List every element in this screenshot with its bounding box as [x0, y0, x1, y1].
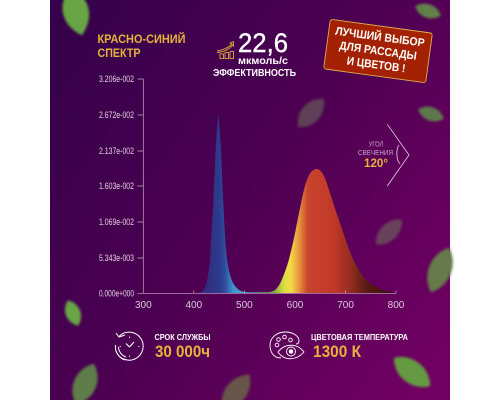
colour temperature label: ЦВЕТОВАЯ ТЕМПЕРАТУРА [311, 332, 408, 342]
x axis labels: 800 [388, 300, 405, 311]
service life value: 30 000ч [155, 343, 210, 361]
service life block [115, 332, 210, 361]
callout badge: И ЦВЕТОВ ! [346, 55, 406, 75]
angle label: СВЕЧЕНИЯ [358, 150, 393, 157]
spectrum chart [99, 74, 405, 311]
y axis labels: 2.137e-002 [99, 146, 134, 156]
colour temperature block [270, 332, 408, 361]
leaf: top right [413, 0, 443, 22]
callout badge: ЛУЧШИЙ ВЫБОР [334, 25, 426, 50]
y axis labels: 5.343e-003 [99, 253, 134, 263]
leaf: bottom centre [214, 368, 258, 400]
leaf: bottom right [387, 349, 437, 395]
icon: angle [387, 124, 409, 186]
leaf: right edge [421, 244, 459, 296]
leaf: top left [58, 0, 94, 38]
icon: efficiency growth [217, 42, 234, 58]
spectrum curve [195, 114, 396, 293]
leaf: upper middle [291, 92, 331, 134]
efficiency value [213, 28, 296, 79]
efficiency value: ЭФФЕКТИВНОСТЬ [213, 68, 296, 79]
heading: spectrum type: СПЕКТР [98, 48, 141, 60]
callout badge: ДЛЯ РАССАДЫ [338, 40, 417, 63]
y axis labels [99, 74, 134, 298]
leaf: lower left [61, 298, 85, 328]
y axis labels: 1.069e-002 [99, 217, 134, 227]
background panel [50, 0, 450, 400]
angle label [358, 142, 393, 170]
x axis labels: 500 [236, 300, 253, 311]
x axis labels: 700 [337, 300, 354, 311]
x axis labels: 600 [287, 300, 304, 311]
beam angle [358, 124, 409, 186]
x axis labels: 300 [135, 300, 152, 311]
efficiency value: мкмоль/с [238, 55, 288, 67]
angle label: 120° [364, 156, 388, 170]
leaf: right of badge [416, 103, 446, 125]
x axis labels [135, 300, 405, 311]
y axis labels: 3.206e-002 [99, 74, 134, 84]
y axis labels: 2.672e-002 [99, 110, 134, 120]
efficiency value: 22,6 [238, 28, 288, 58]
heading: spectrum type: КРАСНО-СИНИЙ [98, 33, 186, 46]
colour temperature value: 1300 К [313, 343, 362, 361]
callout badge [324, 19, 432, 83]
leaf: bottom left [66, 359, 104, 400]
y axis [138, 79, 396, 293]
icon: palette and eye [270, 332, 304, 359]
x axis labels: 400 [185, 300, 203, 311]
heading: spectrum type [98, 33, 186, 60]
service life label: СРОК СЛУЖБЫ [154, 332, 210, 342]
y axis labels: 1.603e-002 [99, 181, 134, 191]
leaf: right middle [370, 213, 408, 251]
angle label: УГОЛ [368, 142, 384, 148]
y axis labels: 0.000e+000 [99, 288, 134, 298]
icon: clock [115, 332, 143, 360]
